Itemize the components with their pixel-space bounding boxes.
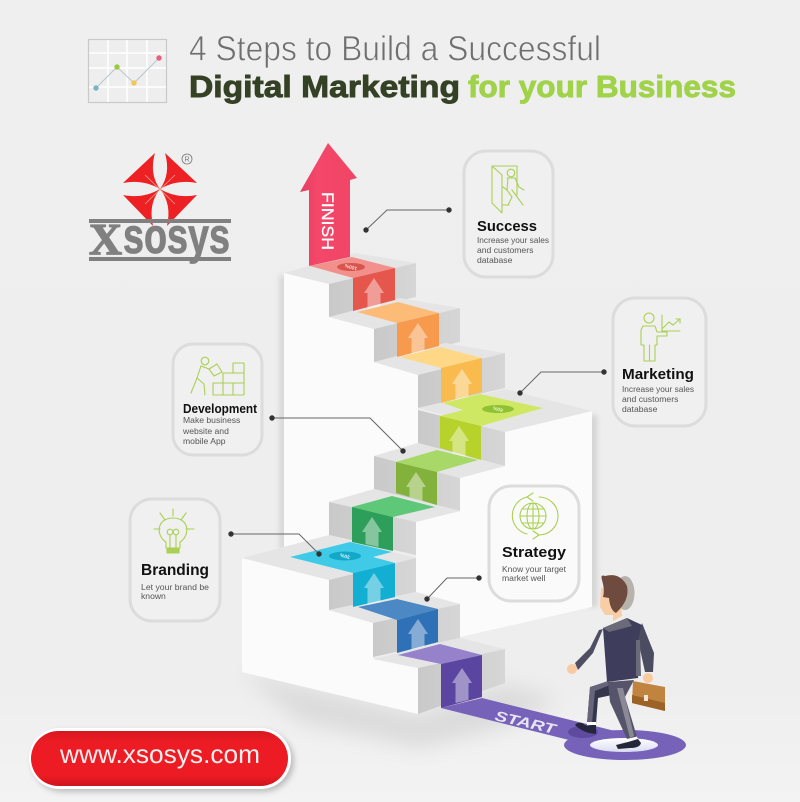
icon: presenter	[641, 313, 680, 361]
heading: strategy: Strategy	[502, 544, 567, 561]
gray steps upper flight	[284, 253, 505, 408]
rear leg	[587, 681, 622, 724]
description: marketing: Increase your sales	[622, 384, 694, 394]
logo: Xsosys: sosys	[123, 208, 230, 264]
businessman with briefcase	[567, 575, 665, 749]
chart icon	[88, 40, 166, 102]
icon: door	[492, 166, 524, 213]
step: lime	[440, 394, 543, 460]
jacket	[603, 618, 642, 682]
description: marketing	[622, 384, 694, 414]
logo: Xsosys	[89, 153, 231, 264]
website button	[29, 728, 291, 789]
panel: marketing	[613, 298, 706, 426]
step: cyan	[290, 542, 395, 607]
description: success: Increase your sales	[477, 235, 549, 245]
description: marketing: and customers	[622, 394, 678, 404]
title: Digital Marketing	[189, 69, 460, 104]
description: branding	[141, 582, 209, 601]
step: purple	[398, 644, 482, 708]
description: success	[477, 235, 549, 265]
step: cyan: 30%	[339, 551, 351, 560]
panel: strategy	[489, 486, 579, 601]
ground shadow	[242, 275, 597, 748]
step: lime: 60%	[492, 404, 504, 413]
staircase	[242, 143, 686, 760]
connector: development	[269, 415, 406, 454]
back arm	[638, 623, 654, 672]
description: strategy	[502, 564, 567, 583]
heading: success: Success	[477, 218, 537, 235]
step: blue	[358, 599, 438, 653]
finish arrow	[300, 143, 357, 266]
description: success: database	[477, 255, 513, 265]
front leg	[608, 680, 637, 739]
gray steps lower flight	[242, 535, 505, 714]
description: branding: Let your brand be	[141, 582, 209, 592]
description: strategy: market well	[502, 573, 546, 583]
step: green	[352, 496, 435, 551]
briefcase	[632, 681, 665, 711]
description: development: Make business	[183, 415, 240, 425]
panel: development	[173, 344, 262, 455]
panel: success	[464, 151, 553, 277]
white body upper	[284, 273, 418, 560]
step: yellow	[400, 347, 482, 403]
heading: development: Development	[183, 402, 258, 416]
connector: success	[363, 207, 452, 233]
head	[600, 575, 634, 621]
white body right	[416, 411, 592, 637]
title: 4 Steps to Build a Successful	[189, 30, 601, 68]
title: for your Business	[468, 69, 736, 104]
step: orange	[357, 302, 439, 357]
connector: marketing	[517, 369, 607, 396]
logo: Xsosys: X	[89, 215, 122, 264]
description: development	[182, 415, 240, 446]
title	[189, 30, 736, 104]
finish arrow: FINISH	[318, 192, 337, 250]
step: olive	[396, 450, 478, 505]
step: red	[310, 257, 395, 311]
description: branding: known	[141, 591, 166, 601]
logo: Xsosys: R	[184, 156, 190, 164]
hands	[567, 664, 577, 674]
start path: START	[493, 707, 559, 737]
socks	[587, 722, 638, 742]
description: marketing: database	[622, 404, 658, 414]
white body lower	[242, 558, 418, 714]
icon: light bulb	[154, 509, 194, 553]
heading: marketing: Marketing	[622, 366, 694, 383]
connector: strategy	[424, 575, 482, 602]
gray steps middle flight	[329, 389, 592, 555]
connector: branding	[228, 531, 322, 557]
heading: branding: Branding	[141, 562, 209, 579]
step: red: 100%	[344, 262, 358, 271]
start path	[441, 698, 686, 760]
website button: www.xsosys.com	[59, 739, 260, 769]
front shoe	[616, 739, 641, 749]
icon: stacking blocks	[191, 357, 244, 395]
front arm	[575, 629, 603, 670]
panel: branding	[130, 499, 220, 621]
description: development: website and	[182, 426, 229, 436]
icon: globe	[512, 493, 558, 539]
description: development: mobile App	[183, 436, 226, 446]
description: strategy: Know your target	[502, 564, 567, 574]
description: success: and customers	[477, 245, 533, 255]
rear shoe	[575, 723, 596, 734]
